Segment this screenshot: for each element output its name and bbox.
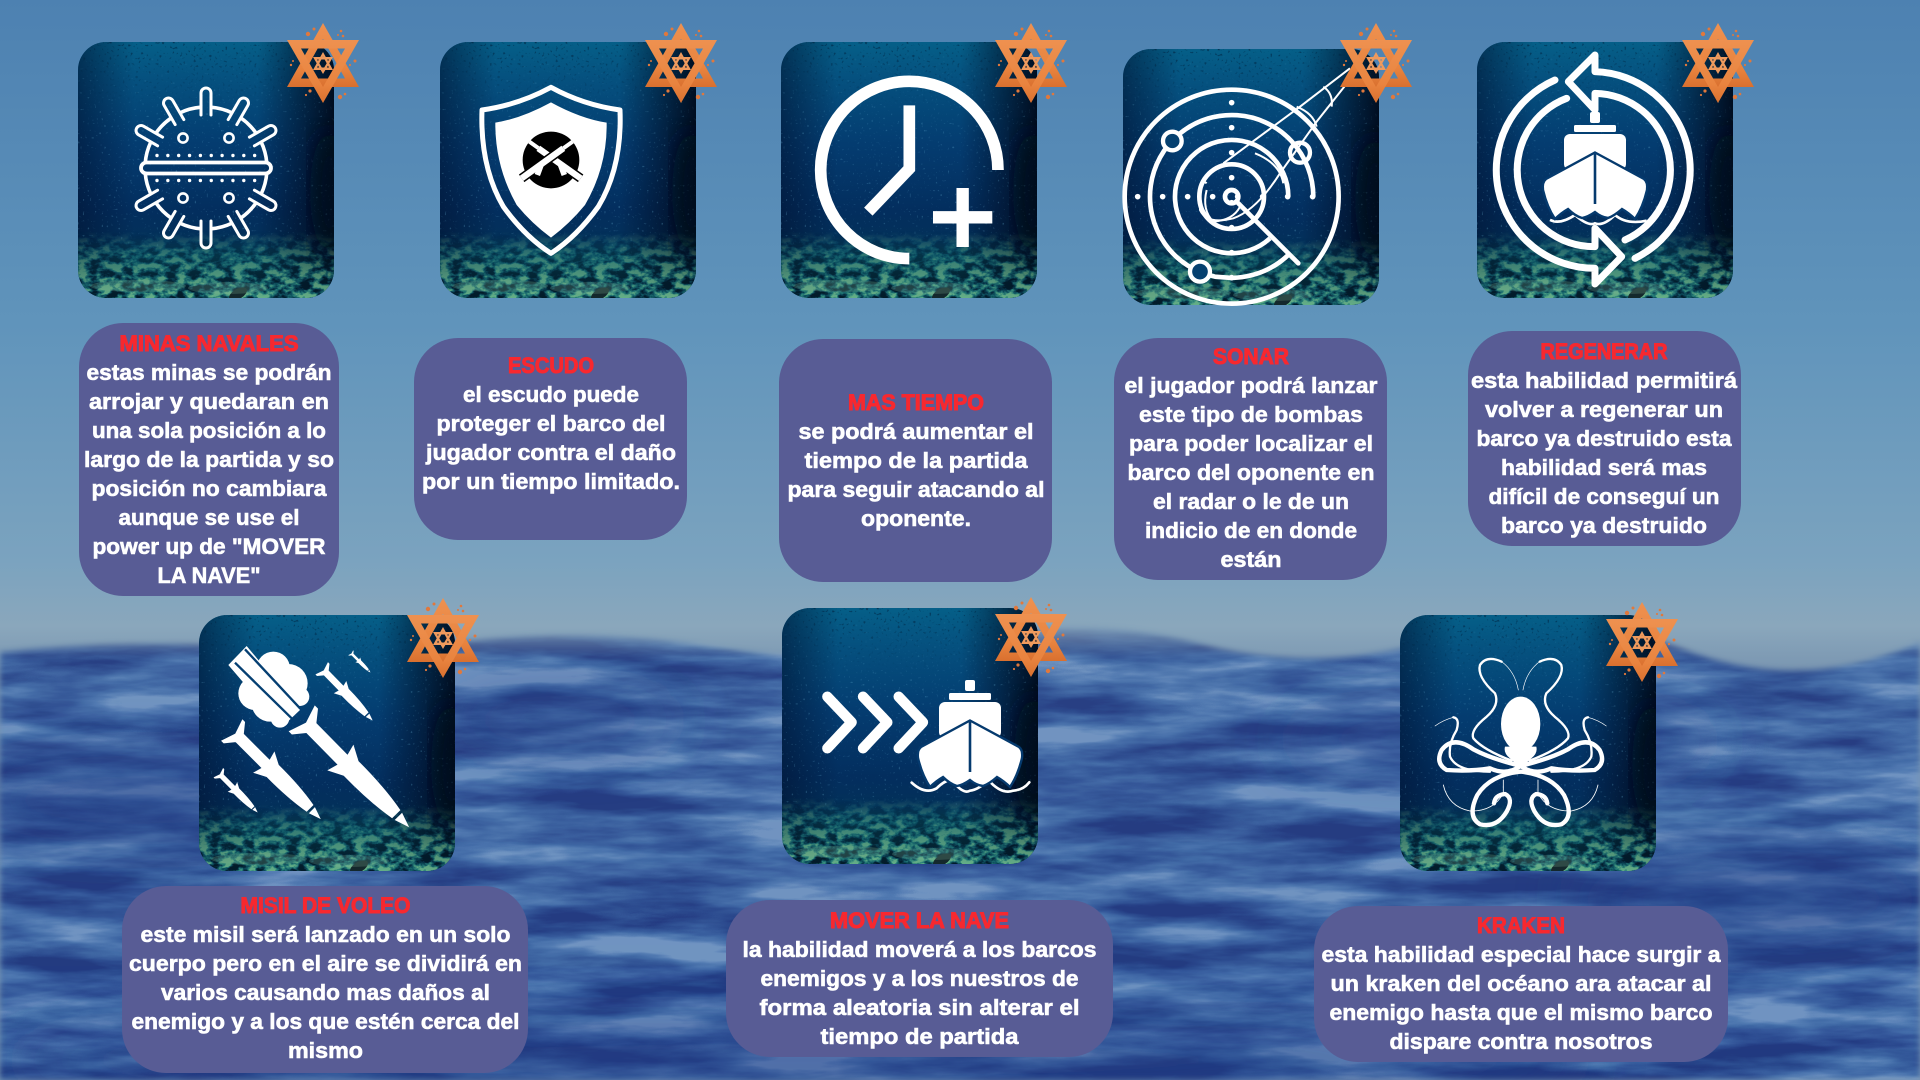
icon: volley missiles — [214, 646, 422, 840]
text block: difícil de conseguí un — [1488, 484, 1720, 509]
icon: kraken — [1435, 659, 1606, 825]
text block: aunque se use el — [118, 505, 300, 530]
panel: minas navales icon card — [78, 23, 359, 303]
panel: mas tiempo description — [779, 339, 1052, 582]
text block — [788, 419, 1044, 531]
text block — [84, 360, 334, 588]
text block: un kraken del océano ara atacar al — [1330, 971, 1712, 996]
text block: se podrá aumentar el — [798, 419, 1034, 444]
panel: kraken icon card — [1400, 602, 1678, 876]
text block: barco ya destruido — [1501, 513, 1707, 538]
text block: forma aleatoria sin alterar el — [760, 995, 1080, 1020]
panel: sonar description — [1114, 338, 1387, 580]
icon: star — [1606, 602, 1678, 682]
heading: MOVER LA NAVE — [830, 908, 1009, 933]
text block: dispare contra nosotros — [1390, 1029, 1652, 1054]
text block: para seguir atacando al — [788, 477, 1044, 502]
text block: volver a regenerar un — [1485, 397, 1723, 422]
text block: arrojar y quedaran en — [89, 389, 329, 414]
text block: este misil será lanzado en un solo — [140, 922, 511, 947]
panel: regenerar description — [1468, 331, 1741, 546]
background: sea waves — [0, 590, 1920, 1080]
panel: escudo icon card — [440, 23, 717, 303]
text block: estas minas se podrán — [86, 360, 332, 385]
text block: enemigos y a los nuestros de — [760, 966, 1078, 991]
text block: esta habilidad permitirá — [1471, 368, 1738, 393]
text block: indicio de en donde — [1145, 518, 1357, 543]
icon: shield — [482, 87, 620, 253]
text block: tiempo de la partida — [804, 448, 1028, 473]
panel: minas navales description — [79, 323, 339, 596]
text block — [1322, 942, 1721, 1054]
text block: enemigo y a los que estén cerca del — [132, 1009, 520, 1034]
text block: enemigo hasta que el mismo barco — [1330, 1000, 1712, 1025]
text block — [1124, 373, 1378, 572]
text block: el escudo puede — [463, 382, 639, 407]
heading: MISIL DE VOLEO — [240, 893, 410, 918]
panel: mas tiempo icon card — [781, 23, 1067, 303]
text block: este tipo de bombas — [1139, 402, 1363, 427]
icon: ship — [1543, 112, 1647, 219]
text block: jugador contra el daño — [425, 440, 676, 465]
text block — [422, 382, 680, 494]
icon: star — [995, 597, 1067, 677]
heading: REGENERAR — [1540, 339, 1668, 364]
icon: clock plus — [821, 81, 998, 259]
panel: mover la nave icon card — [782, 597, 1067, 869]
text block: tiempo de partida — [820, 1024, 1019, 1049]
text block: para poder localizar el — [1129, 431, 1373, 456]
text block: una sola posición a lo — [92, 418, 326, 443]
panel: mover la nave description — [726, 900, 1113, 1057]
text block — [1471, 368, 1738, 538]
heading: SONAR — [1213, 344, 1289, 369]
text block: power up de "MOVER — [92, 534, 326, 559]
text block: por un tiempo limitado. — [422, 469, 680, 494]
text block: el jugador podrá lanzar — [1124, 373, 1378, 398]
text block: LA NAVE" — [158, 563, 260, 588]
text block: esta habilidad especial hace surgir a — [1322, 942, 1721, 967]
panel: regenerar icon card — [1477, 23, 1754, 303]
text block: el radar o le de un — [1153, 489, 1349, 514]
text block: posición no cambiara — [92, 476, 327, 501]
heading: ESCUDO — [508, 353, 594, 378]
text block: proteger el barco del — [436, 411, 666, 436]
text block — [129, 922, 522, 1063]
icon: naval mine — [134, 88, 278, 248]
text block: oponente. — [861, 506, 971, 531]
heading: MINAS NAVALES — [120, 331, 298, 356]
icon: star — [645, 23, 717, 103]
text block: están — [1220, 547, 1282, 572]
icon: star — [407, 598, 479, 678]
panel: kraken description — [1314, 906, 1728, 1062]
icon: star — [995, 23, 1067, 103]
panel: escudo description — [414, 338, 687, 540]
text block: largo de la partida y so — [84, 447, 334, 472]
text block: cuerpo pero en el aire se dividirá en — [129, 951, 522, 976]
text block: barco ya destruido esta — [1476, 426, 1732, 451]
text block: varios causando mas daños al — [161, 980, 490, 1005]
text block: mismo — [288, 1038, 363, 1063]
panel: sonar icon card — [1123, 23, 1412, 310]
panel: misil de voleo icon card — [199, 598, 479, 876]
heading: MAS TIEMPO — [848, 390, 984, 415]
icon: regenerate ship — [1496, 55, 1690, 284]
icon: sonar radar — [1125, 68, 1350, 304]
icon: star — [287, 23, 359, 103]
panel: misil de voleo description — [122, 886, 528, 1073]
text block — [742, 937, 1096, 1049]
icon: ship — [918, 680, 1022, 787]
icon: star — [1340, 23, 1412, 103]
text block: habilidad será mas — [1501, 455, 1707, 480]
icon: chevrons — [827, 697, 1029, 792]
heading: KRAKEN — [1477, 913, 1565, 938]
icon: star — [1682, 23, 1754, 103]
text block: la habilidad moverá a los barcos — [742, 937, 1096, 962]
text block: barco del oponente en — [1128, 460, 1374, 485]
